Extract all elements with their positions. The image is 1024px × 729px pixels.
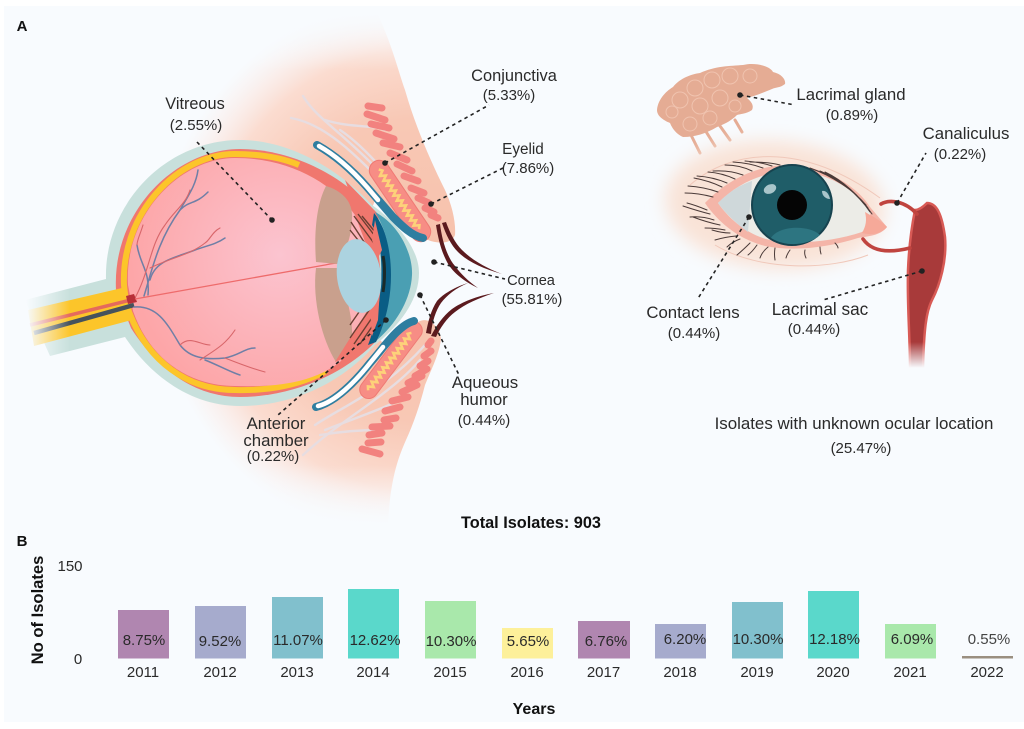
anterior chamber dark <box>368 213 392 345</box>
choroid <box>116 149 386 397</box>
skin of the face and eyelids <box>150 15 455 525</box>
bar 2017 <box>578 621 630 681</box>
callout: cornea: Cornea <box>507 273 556 289</box>
bar 2011: 2011 <box>127 664 159 681</box>
lower tarsal plate <box>356 318 426 402</box>
bar 2014: 12.62% <box>350 632 400 649</box>
bar 2021: 2021 <box>893 664 927 681</box>
lid creases <box>690 157 880 266</box>
x axis title: Years <box>513 701 555 718</box>
bar 2012 <box>195 606 246 681</box>
callout: conjunctiva: (5.33%) <box>483 87 535 104</box>
bar 2014 <box>348 589 400 681</box>
bar 2022: 2022 <box>970 664 1004 681</box>
bar 2020: 12.18% <box>809 631 860 648</box>
central canal line <box>135 263 340 299</box>
callout: canaliculus: (0.22%) <box>934 146 986 163</box>
callout: lacrimal gland: Lacrimal gland <box>796 85 906 104</box>
callout: aqueous humor <box>417 292 518 429</box>
bar 2013: 11.07% <box>273 632 323 649</box>
bar 2016: 2016 <box>510 664 544 681</box>
bar 2011 <box>118 610 169 681</box>
sclera <box>718 170 870 242</box>
callout: eyelid: Eyelid <box>502 141 544 158</box>
callout: vitreous: Vitreous <box>165 95 225 113</box>
y axis title: No of Isolates <box>28 556 47 664</box>
bar 2016 <box>502 628 553 681</box>
upper eyelid muscle strips <box>367 106 438 218</box>
lacrimal gland ducts <box>690 120 742 153</box>
total isolates: Total Isolates: 903 <box>461 514 601 532</box>
callout: aqueous humor: Aqueous <box>452 373 518 392</box>
upper tarsal plate <box>365 156 435 246</box>
bar 2020 <box>808 591 860 681</box>
bar 2015 <box>425 601 476 681</box>
upper eyelid fibres <box>291 96 425 222</box>
callout: contact lens: Contact lens <box>646 303 740 322</box>
retina yellow layer <box>124 154 326 390</box>
callout: lacrimal gland: (0.89%) <box>826 107 878 124</box>
callout: anterior chamber <box>243 317 389 465</box>
callout: canaliculus <box>894 124 1009 206</box>
lower eyelashes <box>683 203 838 260</box>
bar 2014: 2014 <box>356 664 390 681</box>
canaliculi <box>863 201 917 251</box>
lacrimal gland <box>657 64 785 137</box>
bar 2013 <box>272 597 323 681</box>
callout: eyelid: (7.86%) <box>502 160 554 177</box>
bar 2015: 10.30% <box>426 633 476 650</box>
lower eyelid muscle strips <box>362 341 431 454</box>
bar 2017: 6.76% <box>585 633 627 650</box>
skin around the eye <box>661 133 889 277</box>
callout: aqueous humor: humor <box>460 390 508 409</box>
iris <box>370 220 382 336</box>
bar 2016: 5.65% <box>507 633 549 650</box>
y axis ticks <box>57 558 83 668</box>
bar 2022: 0.55% <box>968 631 1010 648</box>
callout: conjunctiva: Conjunctiva <box>471 67 558 85</box>
bar 2011: 8.75% <box>123 632 165 649</box>
iris <box>752 165 832 245</box>
callout: eyelid <box>428 141 554 207</box>
bar 2012: 9.52% <box>199 633 241 650</box>
bar 2021: 6.09% <box>891 631 933 648</box>
text: unknown location: (25.47%) <box>831 440 891 457</box>
callout: anterior chamber: Anterior <box>247 414 306 433</box>
callout: anterior chamber: chamber <box>243 431 309 450</box>
pupil edge <box>383 256 384 292</box>
ciliary body <box>315 180 382 362</box>
panel label B: B <box>17 533 28 550</box>
callout: aqueous humor: (0.44%) <box>458 412 510 429</box>
callout: contact lens <box>646 214 752 342</box>
callout: lacrimal sac: (0.44%) <box>788 321 840 338</box>
bar 2012: 2012 <box>203 664 237 681</box>
callout: lacrimal sac: Lacrimal sac <box>772 299 869 319</box>
optic nerve <box>20 285 135 365</box>
bar 2020: 2020 <box>816 664 850 681</box>
y axis ticks: 150 <box>57 558 83 575</box>
lower eyelid fibres <box>303 345 425 455</box>
eyelid rim <box>705 165 887 249</box>
bar 2019: 2019 <box>740 664 774 681</box>
upper conjunctival sac <box>317 145 423 238</box>
illustration: eye cross-section <box>20 12 502 527</box>
callout: contact lens: (0.44%) <box>668 325 720 342</box>
panel B: isolates per year <box>17 533 1013 718</box>
text: unknown location <box>715 414 993 457</box>
bar 2021 <box>885 624 936 681</box>
bar 2015: 2015 <box>433 664 467 681</box>
anterior chamber teal <box>375 212 412 340</box>
upper eyelashes <box>685 161 872 214</box>
callout: lacrimal gland <box>737 85 906 124</box>
callout: vitreous: (2.55%) <box>170 117 222 134</box>
callout: anterior chamber: (0.22%) <box>247 448 299 465</box>
callout: canaliculus: Canaliculus <box>923 124 1009 143</box>
lacrimal sac and duct <box>905 203 945 370</box>
panel A: ocular anatomy <box>17 12 1009 532</box>
lower conjunctival sac <box>316 321 414 407</box>
callout: conjunctiva <box>382 67 558 166</box>
bar 2018 <box>655 624 706 681</box>
bar 2017: 2017 <box>587 664 620 681</box>
bar 2018: 6.20% <box>664 631 706 648</box>
illustration: external eye and lacrimal system <box>657 64 945 370</box>
retinal vessels <box>126 170 265 375</box>
eyelashes <box>426 222 502 337</box>
callout: cornea: (55.81%) <box>502 291 562 308</box>
y axis ticks: 0 <box>74 651 82 668</box>
callout: cornea <box>431 259 562 308</box>
caruncle <box>862 212 887 234</box>
callout: vitreous <box>165 95 275 223</box>
text: unknown location: Isolates with unknown ocular location <box>715 414 993 433</box>
bar 2018: 2018 <box>663 664 697 681</box>
panel label A: A <box>17 18 28 35</box>
vitreous body <box>128 158 372 386</box>
bar 2019 <box>732 602 783 681</box>
bar chart <box>118 589 1013 681</box>
bar 2022 <box>962 631 1013 681</box>
bar 2019: 10.30% <box>733 631 783 648</box>
lens <box>333 237 385 315</box>
sclera and optic nerve sheath <box>25 140 419 406</box>
callout: lacrimal sac <box>772 268 925 338</box>
bar 2013: 2013 <box>280 664 314 681</box>
